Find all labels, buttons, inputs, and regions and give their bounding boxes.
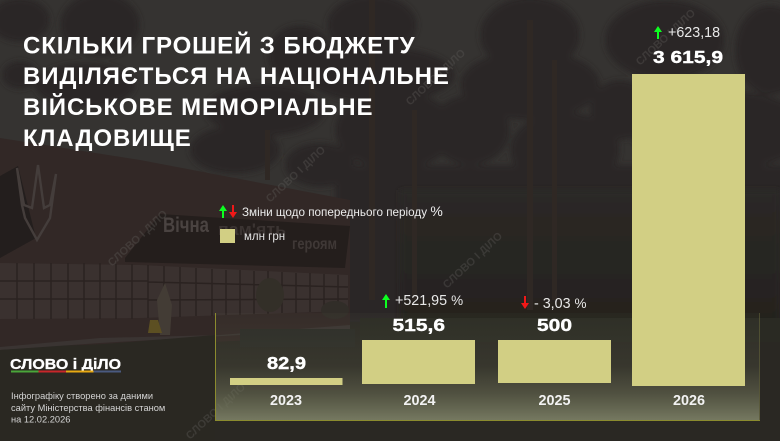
legend swatch bbox=[220, 229, 235, 243]
icon: red down arrow bbox=[229, 205, 237, 218]
legend label: units: млн грн bbox=[244, 231, 285, 243]
bar 2024 bbox=[362, 293, 475, 409]
bar 2024: +521,95 % bbox=[395, 293, 463, 309]
source note: Інфографіку створено за даними bbox=[11, 391, 153, 401]
watermarks: СЛОВО І ДІЛО bbox=[404, 47, 468, 108]
watermarks: СЛОВО І ДІЛО bbox=[441, 230, 505, 291]
title: ВІЙСЬКОВЕ МЕМОРІАЛЬНЕ bbox=[23, 93, 373, 121]
watermarks: СЛОВО І ДІЛО bbox=[264, 144, 328, 205]
bar 2025: 500 bbox=[537, 315, 572, 335]
bar 2026: +623,18 bbox=[668, 25, 720, 41]
source note: сайту Міністерства фінансів станом bbox=[11, 403, 165, 413]
title: КЛАДОВИЩЕ bbox=[23, 125, 192, 152]
logo: СЛОВО і ДіЛО bbox=[10, 356, 121, 373]
bar 2025: 2025 bbox=[538, 393, 571, 409]
background: memorial scene: Вічна bbox=[163, 214, 209, 237]
bar 2025: - 3,03 % bbox=[534, 296, 587, 312]
bar 2024: 2024 bbox=[403, 393, 436, 409]
bar 2026: 3 615,9 bbox=[653, 47, 723, 67]
legend label: changes: Зміни щодо попереднього періоду % bbox=[242, 203, 443, 219]
bar 2024: 515,6 bbox=[392, 315, 445, 335]
bar 2023: 2023 bbox=[270, 393, 302, 409]
watermarks: СЛОВО І ДІЛО bbox=[106, 208, 170, 269]
source note: на 12.02.2026 bbox=[11, 414, 70, 424]
bar 2026: 2026 bbox=[673, 393, 705, 409]
watermarks bbox=[106, 7, 698, 441]
watermarks: СЛОВО І ДІЛО bbox=[634, 7, 698, 68]
figures bbox=[148, 278, 349, 335]
title: ВИДІЛЯЄТЬСЯ НА НАЦІОНАЛЬНЕ bbox=[23, 63, 450, 90]
bar 2023: 82,9 bbox=[267, 353, 306, 373]
bar chart bbox=[230, 25, 745, 409]
legend bbox=[219, 203, 443, 243]
icon: green up arrow bbox=[219, 205, 227, 218]
background: memorial scene: героям bbox=[292, 236, 337, 253]
memorial wall bbox=[0, 138, 350, 347]
panel: chart backdrop bbox=[216, 313, 760, 420]
bar 2025 bbox=[498, 296, 611, 409]
background: memorial scene: пам'ять bbox=[218, 220, 286, 239]
watermarks: СЛОВО І ДІЛО bbox=[184, 381, 248, 441]
bar 2026 bbox=[632, 25, 745, 409]
title: СКІЛЬКИ ГРОШЕЙ З БЮДЖЕТУ bbox=[23, 32, 416, 60]
bar 2023 bbox=[230, 353, 342, 409]
